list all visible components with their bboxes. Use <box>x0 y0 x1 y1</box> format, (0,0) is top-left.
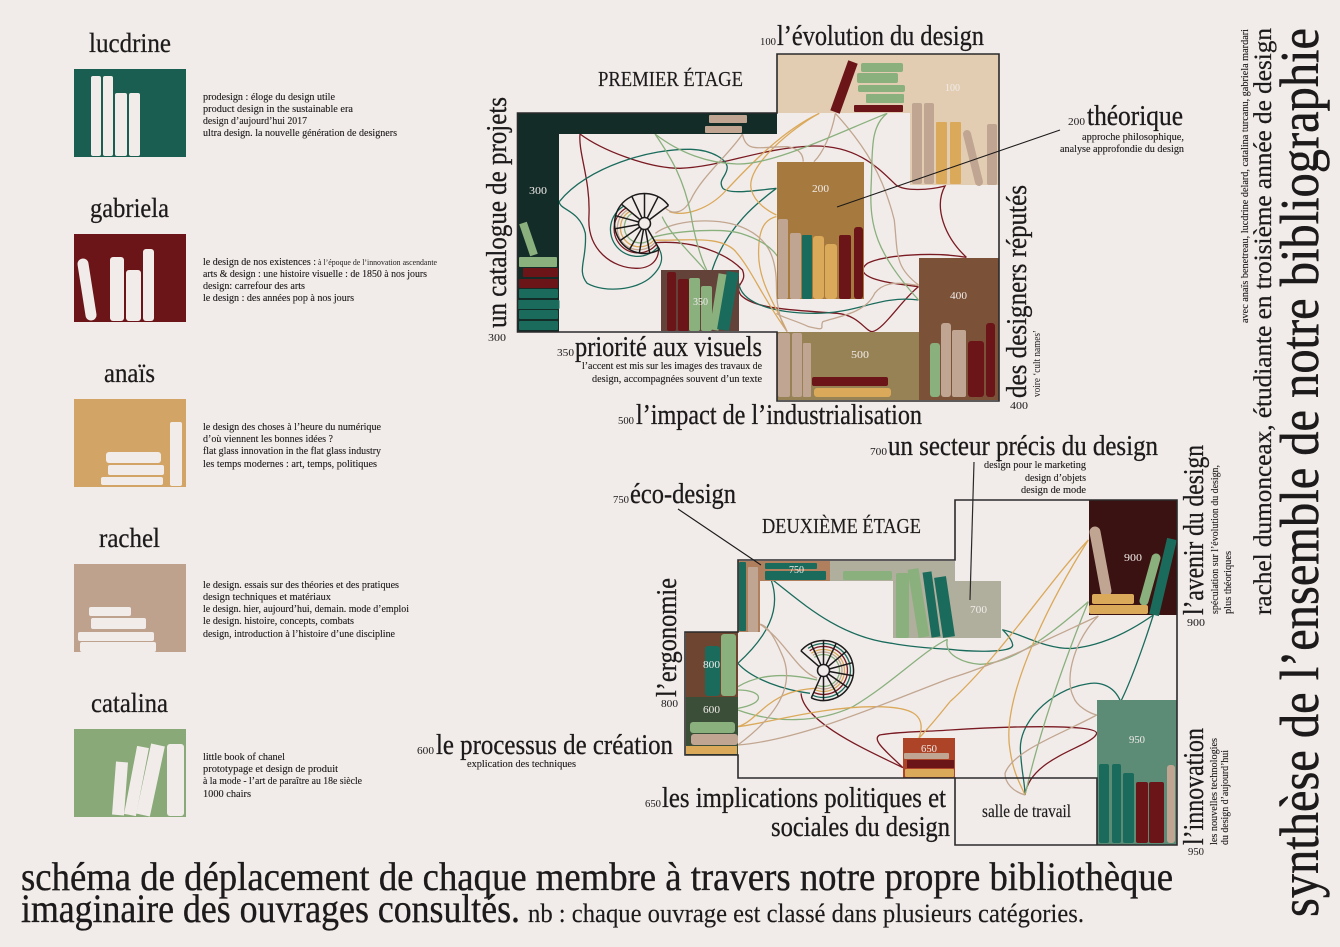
number 100: 100 <box>945 82 960 94</box>
text: gabriela books: design: carrefour des arts <box>203 280 305 292</box>
heading: 200 théorique: théorique <box>1087 100 1183 132</box>
panel: legend catalina <box>74 688 362 817</box>
shelf 300 <box>518 113 777 332</box>
heading: 200 théorique <box>1060 100 1184 155</box>
floor outline 1 <box>518 54 999 401</box>
shelf 700 <box>830 561 1001 638</box>
label: 300: 300 <box>488 332 507 344</box>
shelf 950 <box>1097 700 1177 845</box>
heading: 700 un secteur précis du design <box>870 430 1158 496</box>
arrow: théorique to shelf 200 <box>837 130 1060 207</box>
number 500: 500 <box>851 349 870 361</box>
heading: des designers réputés: voire ‘cult names’ <box>1032 330 1043 397</box>
heading: l'avenir du design <box>1178 445 1234 629</box>
heading: 200 théorique: approche philosophique, <box>1082 131 1184 143</box>
number 750: 750 <box>789 564 804 576</box>
heading: 700 un secteur précis du design: design d’objets <box>1025 472 1086 484</box>
heading: 600 le processus de création <box>417 729 673 770</box>
text: gabriela books: le design de nos existences : <box>203 256 316 268</box>
heading: 600 le processus de création: 600 <box>417 745 435 757</box>
text: catalina books <box>203 751 362 800</box>
caption: schéma de déplacement: imaginaire des ouvrages consultés. <box>21 886 520 931</box>
icon: spiral staircase 2 <box>801 640 854 701</box>
heading: l'innovation <box>1178 728 1231 858</box>
icon: catalina green bookshelf <box>74 729 186 817</box>
text: gabriela books: le design : des années pop à nos jours <box>203 292 354 304</box>
salle de travail room <box>955 778 1097 845</box>
heading: 650 les implications politiques et sociales du design <box>645 782 950 843</box>
number 650: 650 <box>921 743 937 755</box>
shelf 100 <box>777 54 999 185</box>
heading: 650 les implications politiques et sociales du design: sociales du design <box>771 811 950 843</box>
heading: 100 l'évolution du design: l’évolution du design <box>777 20 984 52</box>
text: rachel books: le design. histoire, concepts, combats <box>203 615 354 627</box>
text: anaïs books: flat glass innovation in the flat glass industry <box>203 445 381 457</box>
heading: rachel: rachel <box>99 523 160 553</box>
shelf 800 <box>686 632 738 697</box>
number 900: 900 <box>1124 552 1143 564</box>
movement curves 2 right <box>947 540 1153 795</box>
heading: des designers réputés: des designers réputés <box>1001 185 1033 398</box>
shelf 750 <box>738 561 830 632</box>
movement curves 2 left <box>738 581 950 768</box>
number 700: 700 <box>970 604 988 616</box>
heading: catalina: catalina <box>91 688 168 718</box>
number 800: 800 <box>703 659 721 671</box>
text: lucdrine books: prodesign : éloge du design utile <box>203 91 335 103</box>
number 600: 600 <box>703 704 721 716</box>
heading: l'ergonomie: l’ergonomie <box>651 578 683 697</box>
heading: 700 un secteur précis du design: design pour le marketing <box>984 459 1086 471</box>
shelf 200 <box>777 162 864 299</box>
shelf 500 <box>777 332 919 400</box>
heading: 600 le processus de création: le processus de création <box>436 729 673 761</box>
heading: 600 le processus de création: explication des techniques <box>467 758 576 770</box>
text: catalina books: à la mode - l’art de paraître au 18e siècle <box>203 775 362 787</box>
number 350: 350 <box>693 296 708 308</box>
number 300: 300 <box>529 185 548 197</box>
heading: 350 priorité aux visuels: 350 <box>557 347 575 359</box>
panel: legend anaïs <box>74 358 381 487</box>
text: salle de travail: salle de travail <box>982 801 1071 821</box>
arrow: éco-design to shelf 750 <box>678 509 761 565</box>
heading: gabriela: gabriela <box>90 193 169 223</box>
heading: des designers réputés <box>1001 185 1043 412</box>
heading: 650 les implications politiques et sociales du design: les implications politiques et <box>662 782 946 814</box>
heading: l'avenir du design: 900 <box>1187 617 1206 629</box>
text: rachel books: le design. hier, aujourd’hui, demain. mode d’emploi <box>203 603 409 615</box>
heading: 700 un secteur précis du design: design de mode <box>1021 484 1086 496</box>
heading: premier étage: PREMIER ÉTAGE <box>598 67 743 91</box>
heading: l'ergonomie: 800 <box>661 698 679 710</box>
icon: lucdrine green bookshelf <box>74 69 186 157</box>
heading: l'avenir du design: l’avenir du design <box>1178 445 1210 615</box>
heading: l'innovation: du design d’aujourd’hui <box>1219 750 1231 845</box>
text: rachel books <box>203 579 409 640</box>
heading: 500 l'impact de l'industrialisation: l’impact de l’industrialisation <box>636 399 922 431</box>
shelf 650 <box>903 738 955 778</box>
number 400: 400 <box>950 290 968 302</box>
heading: 350 priorité aux visuels: priorité aux visuels <box>575 331 762 363</box>
arrow: secteur précis to shelf 700 <box>970 462 974 600</box>
heading: 200 théorique: analyse approfondie du design <box>1060 143 1184 155</box>
heading: 750 éco-design: 750 <box>613 494 629 506</box>
heading: l'innovation: les nouvelles technologies <box>1208 738 1220 845</box>
caption: schéma de déplacement <box>21 854 1173 931</box>
heading: 500 l'impact de l'industrialisation: 500 <box>618 415 634 427</box>
heading: 750 éco-design: éco-design <box>630 478 736 510</box>
heading: l'innovation: 950 <box>1188 846 1204 858</box>
text: gabriela books: arts & design : une histoire visuelle : de 1850 à nos jours <box>203 268 427 280</box>
text: lucdrine books <box>203 91 397 139</box>
icon: spiral staircase 1 <box>610 193 668 256</box>
text: lucdrine books: design d’aujourd’hui 2017 <box>203 115 307 127</box>
heading: 100 l'évolution du design: 100 <box>760 36 776 48</box>
credits: avec: avec anaïs benetreau, lucdrine delard, catalina turcanu, gabriela mardari <box>1239 29 1251 323</box>
panel: legend lucdrine <box>74 28 397 157</box>
heading: un catalogue de projets: un catalogue de projets <box>481 97 513 328</box>
movement curves 1 <box>559 113 966 332</box>
heading: 350 priorité aux visuels: design, accompagnées souvent d’un texte <box>592 373 762 385</box>
heading: lucdrine: lucdrine <box>89 28 171 58</box>
text: lucdrine books: product design in the sustainable era <box>203 103 353 115</box>
shelf 600 <box>686 697 738 755</box>
caption: schéma de déplacement: schéma de déplacement de chaque membre à travers notre propre bibliothèque <box>21 854 1173 899</box>
icon: anaïs gold bookshelf <box>74 399 186 487</box>
heading: l'avenir du design: plus théoriques <box>1222 551 1234 614</box>
text: gabriela books: à l’époque de l’innovation ascendante <box>318 257 437 267</box>
heading: 350 priorité aux visuels: l’accent est mis sur les images des travaux de <box>582 360 762 372</box>
caption: schéma de déplacement: nb : chaque ouvrage est classé dans plusieurs catégories. <box>528 899 1084 928</box>
text: rachel books: le design. essais sur des théories et des pratiques <box>203 579 399 591</box>
heading: 700 un secteur précis du design: un secteur précis du design <box>888 430 1158 462</box>
text: catalina books: 1000 chairs <box>203 788 251 800</box>
number 950: 950 <box>1129 734 1145 746</box>
text: gabriela books <box>203 256 437 304</box>
heading: 350 priorité aux visuels <box>557 331 762 385</box>
text: anaïs books: les temps modernes : art, temps, politiques <box>203 458 377 470</box>
heading: l'avenir du design: spéculation sur l’évolution du design, <box>1209 465 1221 614</box>
heading: 700 un secteur précis du design: 700 <box>870 446 888 458</box>
panel: floor plan premier étage <box>518 54 999 401</box>
text: catalina books: little book of chanel <box>203 751 285 763</box>
heading: 200 théorique: 200 <box>1068 116 1086 128</box>
heading: deuxième étage: DEUXIÈME ÉTAGE <box>762 514 921 538</box>
icon: gabriela burgundy bookshelf <box>74 234 186 322</box>
icon: rachel tan bookshelf <box>74 564 186 652</box>
text: rachel books: design techniques et matériaux <box>203 591 331 603</box>
heading: 650 les implications politiques et sociales du design: 650 <box>645 798 661 810</box>
number 200: 200 <box>812 183 830 195</box>
heading: l'innovation: l’innovation <box>1178 728 1210 845</box>
panel: legend rachel <box>74 523 409 652</box>
shelf 400 <box>919 258 999 400</box>
shelf 900 <box>1089 500 1177 615</box>
shelf 350 <box>661 270 739 331</box>
text: lucdrine books: ultra design. la nouvelle génération de designers <box>203 127 397 139</box>
subtitle: rachel dumonceax: rachel dumonceax, étudiante en troisième année de design <box>1250 27 1277 615</box>
text: rachel books: design, introduction à l’histoire d’une discipline <box>203 628 395 640</box>
panel: legend gabriela <box>74 193 437 322</box>
text: anaïs books: d’où viennent les bonnes idées ? <box>203 433 333 445</box>
text: anaïs books: le design des choses à l’heure du numérique <box>203 421 381 433</box>
text: anaïs books <box>203 421 381 470</box>
heading: anaïs: anaïs <box>104 358 155 388</box>
floor outline 2 <box>685 500 1177 845</box>
heading: des designers réputés: 400 <box>1010 400 1029 412</box>
panel: floor plan deuxième étage <box>685 500 1177 845</box>
text: catalina books: prototypage et design de produit <box>203 763 338 775</box>
